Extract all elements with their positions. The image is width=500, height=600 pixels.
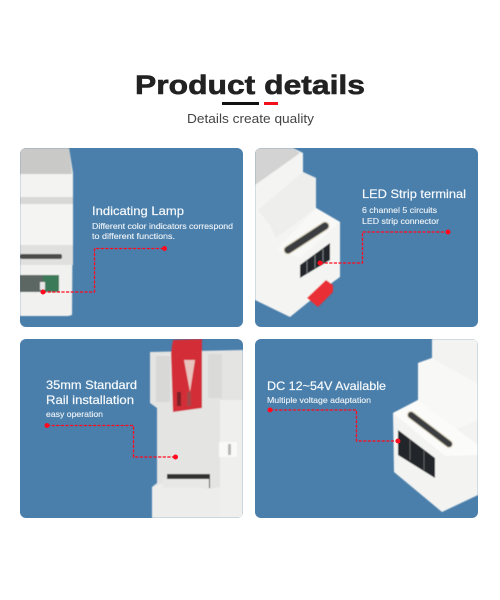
subtitle: Details create quality [187,111,315,126]
title underline [222,102,278,105]
text: DC voltage: Multiple voltage adaptation [267,396,371,405]
text: indicating lamp: to different functions. [92,232,175,241]
text: indicating lamp: Indicating Lamp [92,204,184,218]
text: rail installation: Rail installation [46,393,134,407]
title: Product details [135,70,365,100]
panel: LED strip terminal [255,148,478,327]
callout line [44,423,178,460]
text: LED strip terminal: 6 channel 5 circuits [362,206,437,215]
panel: DC voltage [255,339,478,518]
device: angled end [393,339,478,512]
text: rail installation: 35mm Standard [46,378,137,392]
text: rail installation [46,378,137,419]
callout line [268,408,400,444]
text: rail installation: easy operation [46,410,103,419]
callout line [318,230,450,266]
text: indicating lamp [92,206,232,239]
text: indicating lamp: Different color indicators correspond [92,222,233,231]
callout line [40,246,167,294]
text: DC voltage [268,381,386,404]
device: back view [150,339,243,518]
device: side view [20,148,73,316]
text: LED strip terminal: LED Strip terminal [362,187,466,201]
text: LED strip terminal: LED strip connector [362,217,439,226]
panel: indicating lamp [20,148,243,327]
text: LED strip terminal [362,187,466,226]
device: terminal end [255,148,340,317]
panel: rail installation [20,339,243,518]
text: DC voltage: DC 12~54V Available [267,379,386,393]
